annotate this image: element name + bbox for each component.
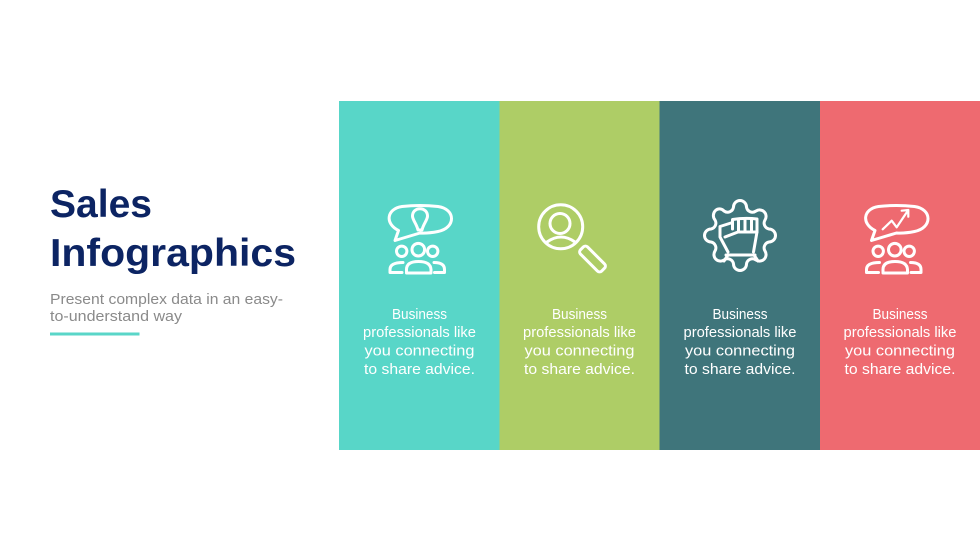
panel: teal	[339, 101, 500, 450]
title: Infographics	[50, 232, 296, 275]
text: coral panel: Business	[872, 306, 928, 323]
text: coral panel	[844, 306, 956, 378]
text: dark teal panel: Business	[712, 306, 768, 323]
text: green panel	[523, 306, 636, 378]
text: coral panel: you connecting	[845, 342, 955, 360]
panel: coral	[820, 101, 980, 450]
text: green panel: professionals like	[523, 324, 636, 341]
text: coral panel: to share advice.	[844, 361, 956, 378]
panel: green	[500, 101, 660, 450]
accent underline	[50, 332, 140, 336]
text: dark teal panel: you connecting	[685, 342, 795, 360]
text: coral panel: professionals like	[844, 324, 956, 341]
subtitle	[50, 291, 283, 325]
text: teal panel: Business	[392, 306, 447, 323]
icon: growth bubble and people	[866, 206, 928, 273]
panel: dark teal	[660, 101, 820, 450]
text: teal panel: professionals like	[363, 324, 476, 341]
subtitle: to-understand way	[50, 308, 183, 325]
text: teal panel	[363, 306, 476, 378]
text: dark teal panel	[684, 306, 796, 378]
text: dark teal panel: to share advice.	[684, 361, 796, 378]
icon: idea bubble and people	[389, 206, 452, 273]
text: green panel: Business	[552, 306, 607, 323]
text: green panel: you connecting	[524, 342, 634, 360]
subtitle: Present complex data in an easy-	[50, 291, 283, 308]
text: dark teal panel: professionals like	[684, 324, 796, 341]
text: teal panel: you connecting	[364, 342, 474, 360]
title: Sales	[50, 183, 152, 226]
icon: fist in gear	[705, 201, 776, 270]
text: teal panel: to share advice.	[364, 361, 475, 378]
icon: magnifier over person	[539, 205, 607, 273]
title	[50, 183, 296, 275]
text: green panel: to share advice.	[524, 361, 635, 378]
